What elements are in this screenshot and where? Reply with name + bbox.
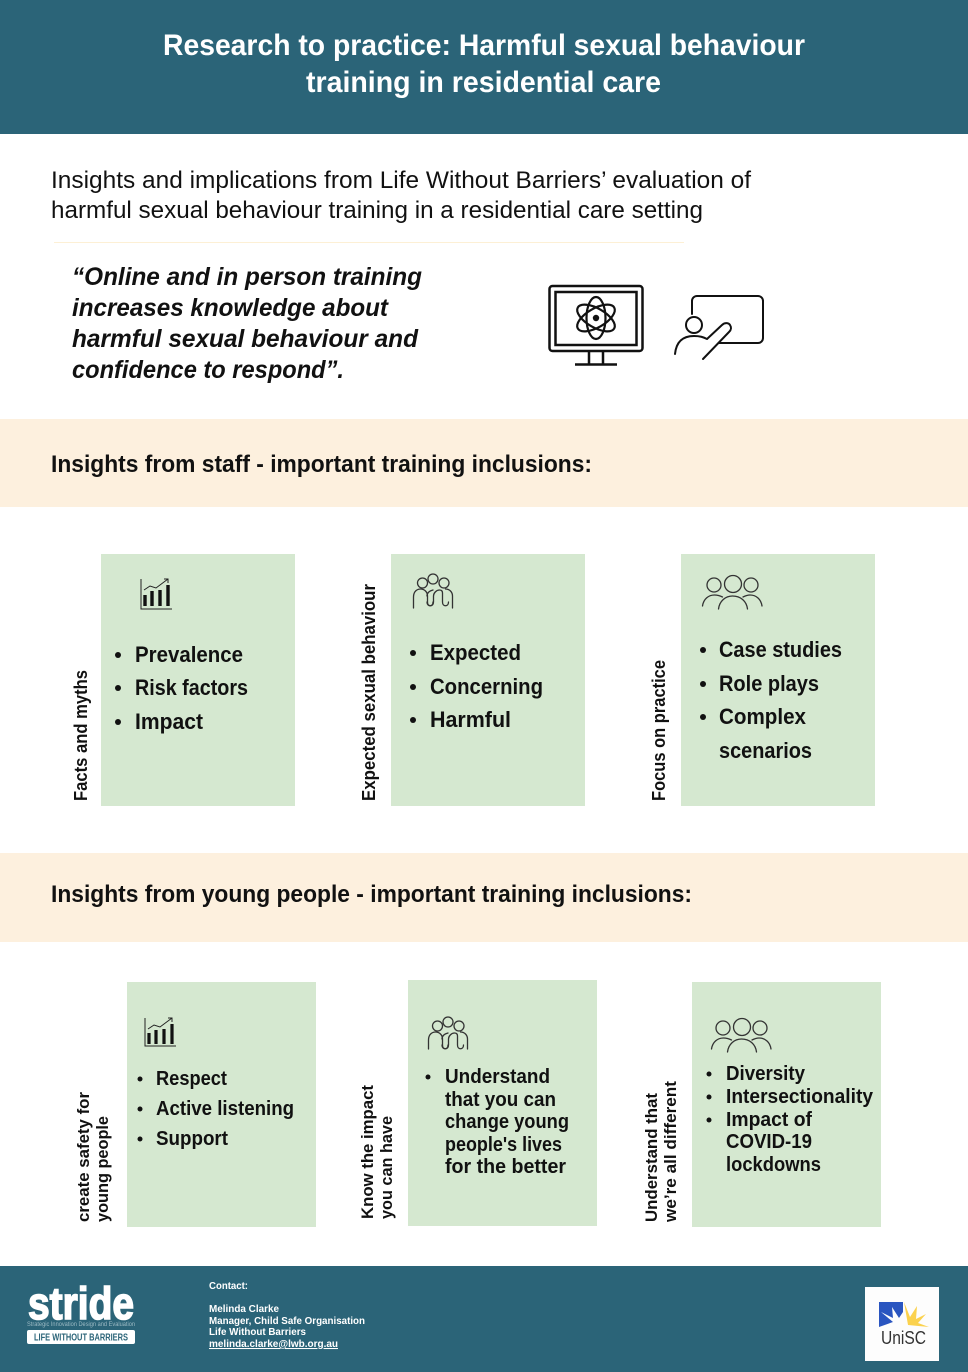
bullet list: Understand (445, 1066, 550, 1088)
quote: “Online and in person training (72, 263, 422, 291)
title: Research to practice: Harmful sexual behaviour (163, 29, 805, 62)
panel: know the impact (358, 980, 597, 1226)
bullet list: people's lives (445, 1134, 562, 1156)
icon: chart (141, 579, 172, 609)
quote: confidence to respond”. (72, 356, 344, 384)
logo: stride: stride (28, 1278, 134, 1329)
bullet list: change young (445, 1111, 569, 1133)
icon: chart (145, 1018, 176, 1046)
bullet list (138, 1068, 294, 1150)
quote: increases knowledge about (72, 294, 390, 322)
contact details: Melinda Clarke (209, 1303, 279, 1315)
contact details: Life Without Barriers (209, 1326, 306, 1338)
panel: expected sexual behaviour (359, 554, 585, 806)
header banner (0, 0, 968, 134)
label: know the impact you can have: Know the impact (358, 1085, 377, 1219)
logo: UniSC (865, 1287, 939, 1361)
quote (72, 263, 422, 384)
label: understand that we're all different: we’re all different (661, 1081, 680, 1223)
intro text (51, 167, 751, 224)
label: facts and myths: Facts and myths (71, 670, 91, 801)
icon: three people (702, 576, 762, 609)
icon: people group (414, 574, 452, 608)
bullet list: COVID-19 (726, 1131, 812, 1153)
bullet list: Prevalence (135, 642, 243, 667)
logo: stride: LIFE WITHOUT BARRIERS (34, 1332, 128, 1344)
bullet list: Case studies (719, 637, 842, 662)
label: understand that we're all different: Understand that (642, 1093, 661, 1222)
bullet list: lockdowns (726, 1154, 821, 1176)
logo: UniSC: UniSC (881, 1328, 926, 1348)
bullet list (426, 1066, 569, 1178)
label: expected sexual behaviour: Expected sexual behaviour (359, 584, 379, 801)
bullet list: that you can (445, 1089, 556, 1111)
contact details: melinda.clarke@lwb.org.au (209, 1338, 338, 1350)
bullet list (115, 642, 248, 734)
contact details: Manager, Child Safe Organisation (209, 1315, 365, 1327)
bullet list: Intersectionality (726, 1086, 874, 1108)
label: create safety for young people: create safety for (74, 1092, 93, 1222)
label: create safety for young people: young people (93, 1116, 112, 1222)
icon: monitor with atom (550, 286, 642, 364)
footer (0, 1266, 968, 1372)
band: insights from young people: Insights from young people - important training inclusions: (51, 881, 692, 908)
bullet list (706, 1063, 874, 1176)
icon: three people (712, 1018, 771, 1052)
band: insights from young people (0, 853, 968, 942)
icon: people group (428, 1017, 468, 1049)
title: training in residential care (306, 66, 661, 99)
icon: presenter at board (675, 296, 763, 359)
label: know the impact you can have (358, 1085, 396, 1219)
panel: create safety (74, 982, 316, 1227)
label: create safety for young people (74, 1092, 112, 1222)
bullet list: scenarios (719, 738, 812, 763)
quote: harmful sexual behaviour and (72, 325, 419, 353)
logo: stride (27, 1278, 135, 1344)
panel: focus on practice (649, 554, 875, 806)
label: understand that we're all different (642, 1081, 680, 1223)
bullet list: Impact (135, 709, 204, 734)
bullet list: Active listening (156, 1098, 294, 1120)
bullet list: Harmful (430, 707, 511, 732)
bullet list (700, 637, 842, 763)
panel: understand differences (642, 982, 881, 1227)
bullet list: Expected (430, 640, 521, 665)
label: focus on practice: Focus on practice (649, 660, 669, 801)
label: know the impact you can have: you can have (377, 1116, 396, 1219)
band: insights from staff (0, 419, 968, 507)
bullet list (410, 640, 543, 732)
bullet list: Complex (719, 704, 807, 729)
bullet list: Impact of (726, 1109, 812, 1131)
band: insights from staff: Insights from staff - important training inclusions: (51, 451, 592, 478)
bullet list: Diversity (726, 1063, 806, 1085)
contact details: Contact: (209, 1280, 248, 1292)
bullet list: Risk factors (135, 675, 248, 700)
logo: stride: Strategic Innovation Design and Evaluation (27, 1321, 135, 1328)
bullet list: Concerning (430, 674, 543, 699)
bullet list: Role plays (719, 671, 819, 696)
bullet list: Support (156, 1128, 228, 1150)
intro text: Insights and implications from Life Without Barriers’ evaluation of (51, 167, 751, 194)
bullet list: Respect (156, 1068, 227, 1090)
bullet list: for the better (445, 1156, 566, 1178)
contact details (209, 1280, 365, 1350)
panel: facts and myths (71, 554, 295, 806)
title (163, 29, 805, 99)
intro text: harmful sexual behaviour training in a residential care setting (51, 197, 703, 224)
